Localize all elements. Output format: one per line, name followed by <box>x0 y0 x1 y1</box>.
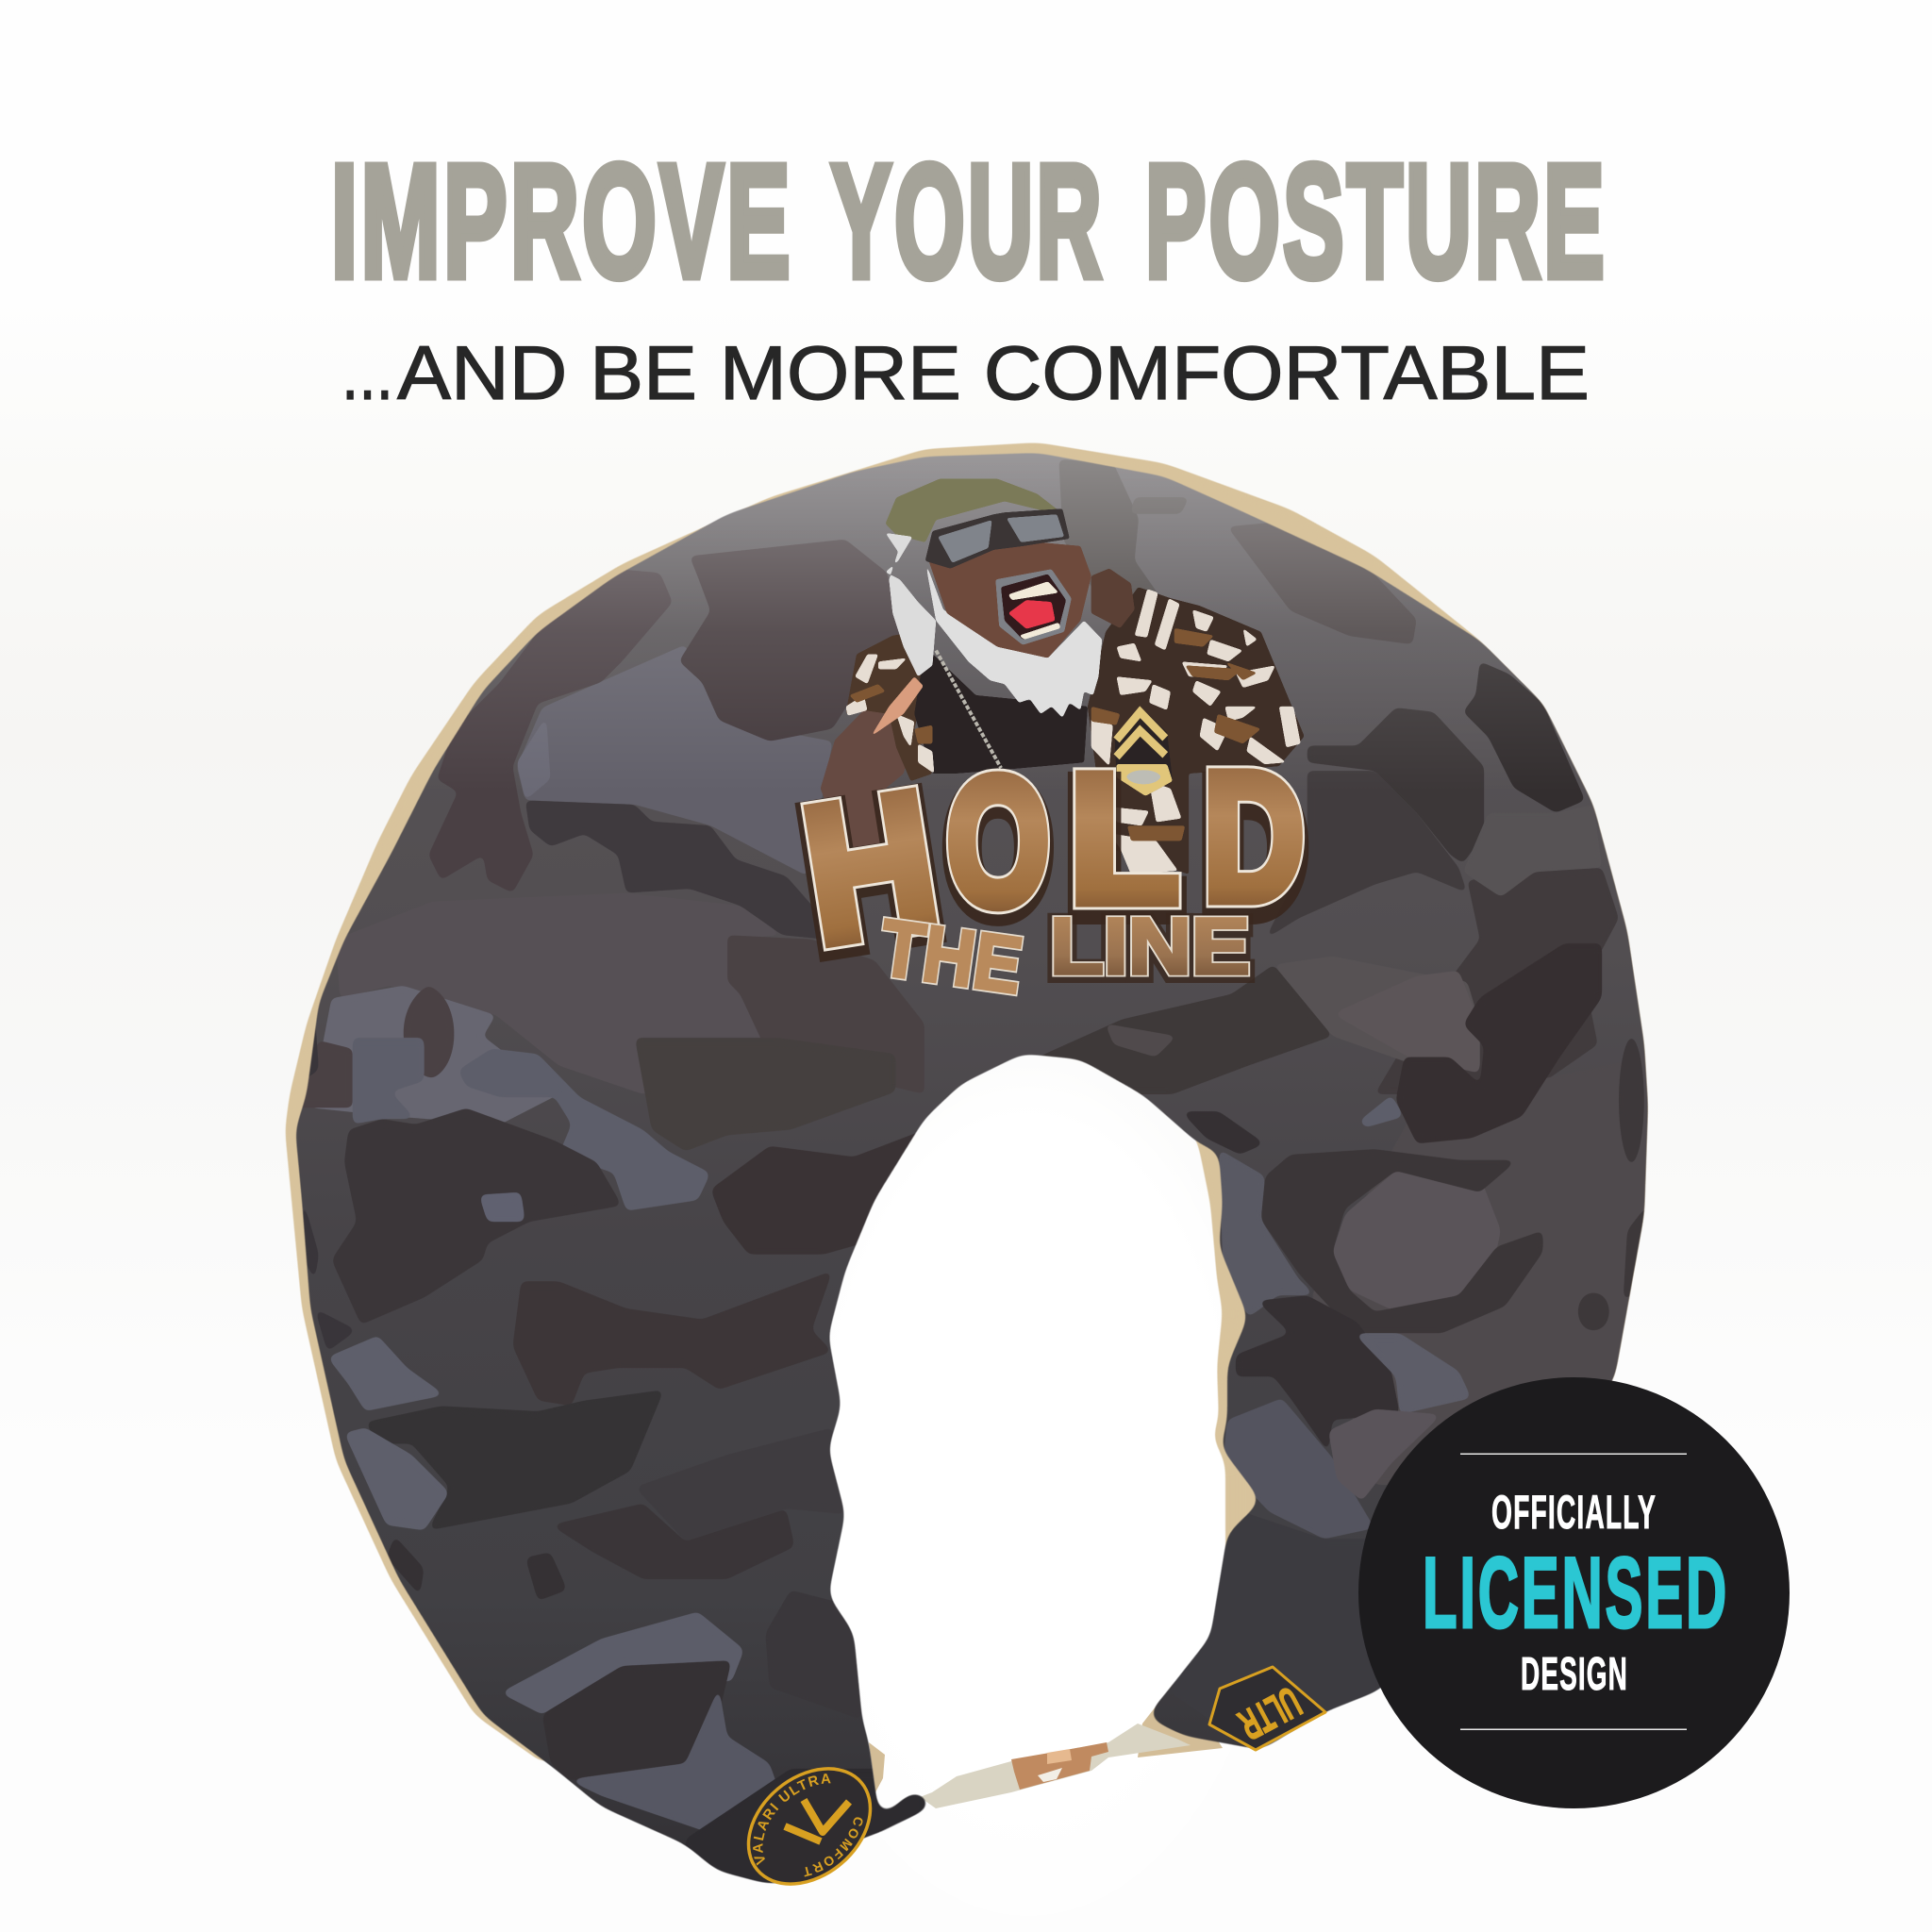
letter outlines: O <box>947 740 1049 942</box>
mouth <box>995 569 1072 645</box>
cap <box>886 479 1066 542</box>
lower left camo <box>264 1010 924 1887</box>
title word improve: IMPROVE <box>331 132 793 311</box>
sunglasses <box>925 508 1070 569</box>
hand <box>821 710 910 863</box>
letter faces: H <box>791 751 950 984</box>
jacket left <box>846 632 932 781</box>
badge bottom rule <box>1460 1728 1687 1730</box>
clasp <box>1011 1742 1108 1790</box>
letter faces: L <box>1070 737 1178 940</box>
subtitle <box>341 331 1590 416</box>
badge design: DESIGN <box>1521 1649 1628 1700</box>
letter shadows: H <box>791 756 950 989</box>
beard <box>925 561 1102 718</box>
cigar <box>871 676 924 737</box>
neck <box>1091 569 1135 628</box>
face <box>929 539 1091 658</box>
jacket brown camo <box>849 628 1261 841</box>
shield text: ULTR <box>1231 1677 1309 1750</box>
letter outlines: D <box>1204 735 1304 938</box>
HOLD lettering <box>791 735 1304 989</box>
title word your: YOUR <box>831 132 1105 311</box>
HOLD THE LINE character artwork <box>821 479 1305 874</box>
embroidered shield patch <box>1209 1667 1325 1750</box>
letter outlines: H <box>791 751 950 984</box>
jacket white camo <box>846 609 1301 874</box>
sleeve stripes <box>1135 589 1180 651</box>
camouflage fabric <box>264 415 1679 1924</box>
patch top text: VALARI ULTRA <box>753 1774 831 1866</box>
fabric base <box>296 453 1645 1846</box>
letter faces: O <box>947 740 1049 942</box>
subtitle words: AND BE MORE COMFORTABLE <box>397 331 1590 416</box>
letter shadows: D <box>1204 746 1304 949</box>
smoke <box>886 533 936 676</box>
black shirt <box>914 647 1088 774</box>
chevrons insignia <box>1115 707 1173 796</box>
word THE: THE <box>874 903 1027 1010</box>
letter outlines: L <box>1070 737 1178 940</box>
THE LINE lettering <box>874 902 1250 1010</box>
neck pillow product <box>285 442 1649 1886</box>
word LINE: LINE <box>1050 902 1250 991</box>
patch bottom text: COMFORT <box>804 1817 862 1877</box>
tan tail near clasp <box>869 1685 1223 1792</box>
letter shadows: L <box>1070 746 1178 949</box>
badge: officially licensed design <box>1358 1377 1790 1808</box>
badge officially: OFFICIALLY <box>1491 1486 1657 1539</box>
strap <box>920 1724 1191 1808</box>
upper right camo <box>1038 459 1648 1094</box>
badge top rule <box>1460 1453 1687 1455</box>
word LINE: LINE <box>1050 902 1250 991</box>
word LINE: LINE <box>1050 904 1250 992</box>
letter faces: D <box>1204 735 1304 938</box>
letter shadows <box>791 746 1304 989</box>
letter faces <box>791 735 1304 984</box>
patch V logo <box>785 1800 849 1841</box>
lower right camo <box>1168 943 1670 1756</box>
top fog fade <box>458 453 1557 738</box>
necklace <box>936 651 1001 768</box>
word THE: THE <box>874 903 1027 1010</box>
tan piping and backing <box>285 442 1648 1769</box>
subtitle dots: ... <box>341 331 393 416</box>
jacket right <box>1088 587 1305 874</box>
upper left camo <box>290 540 924 1124</box>
title <box>331 132 1607 311</box>
embroidered round patch <box>747 1767 872 1886</box>
letter shadows: O <box>947 746 1049 949</box>
badge circle <box>1358 1377 1790 1808</box>
hole highlight <box>745 972 1311 1932</box>
letter outlines <box>791 735 1304 984</box>
